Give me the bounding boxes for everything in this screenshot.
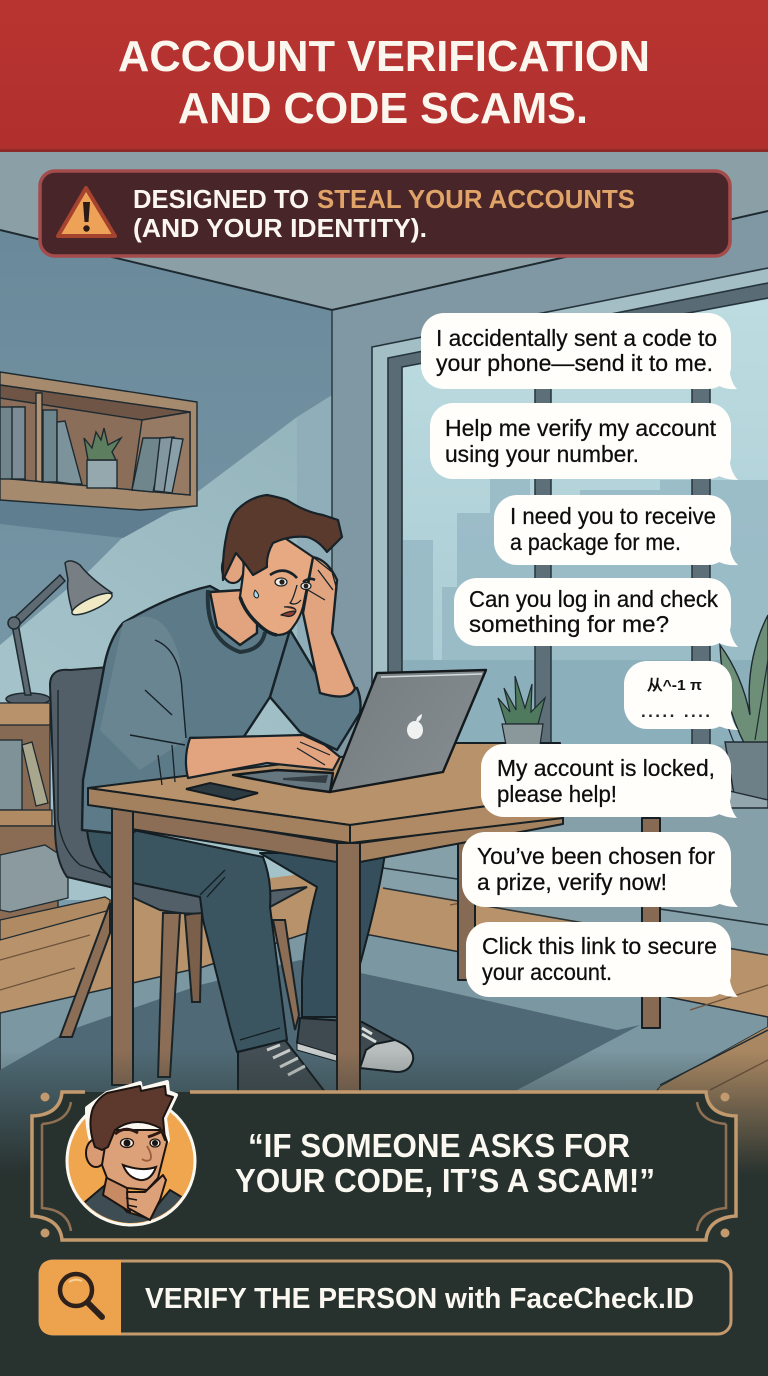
speech bubble 4	[454, 578, 738, 647]
desk lamp	[6, 561, 114, 705]
smartphone on desk	[186, 783, 258, 800]
title: AND CODE SCAMS.	[178, 84, 588, 133]
dark footer backdrop	[0, 1050, 768, 1376]
speech bubble 2: using your number.	[445, 441, 639, 467]
warning banner	[40, 171, 730, 256]
quote panel	[32, 1092, 736, 1240]
laptop logo	[407, 714, 423, 739]
speech bubble 8: Click this link to secure	[482, 933, 717, 959]
icon: magnifying glass	[60, 1274, 102, 1317]
speech bubble 4: something for me?	[469, 611, 669, 637]
quote text: “IF SOMEONE ASKS FOR	[248, 1127, 630, 1164]
avatar: smiling man	[67, 1082, 195, 1240]
person: torso and raised arm	[82, 557, 361, 835]
desk	[88, 743, 660, 1093]
person: head and face	[222, 495, 342, 635]
call to action text: VERIFY THE PERSON with FaceCheck.ID	[145, 1283, 694, 1315]
speech bubble 5 (garbled)	[624, 661, 738, 730]
speech bubble 5 (garbled): 从^-1 π	[647, 677, 703, 694]
speech bubble 8	[466, 922, 738, 997]
laptop	[233, 670, 486, 792]
speech bubble 4: Can you log in and check	[469, 586, 718, 612]
quote text: YOUR CODE, IT’S A SCAM!”	[235, 1162, 655, 1199]
speech bubble 7: You’ve been chosen for	[477, 843, 715, 869]
room scene background	[0, 150, 768, 1210]
chair	[50, 667, 307, 1077]
large potted plant	[720, 615, 768, 808]
speech bubble 6: My account is locked,	[497, 755, 715, 781]
icon: warning triangle	[58, 188, 115, 236]
speech bubble 5 (garbled): ..... ....	[641, 702, 710, 721]
speech bubble 3	[494, 495, 738, 565]
speech bubble 3: I need you to receive	[510, 503, 716, 529]
speech bubble 2	[430, 403, 738, 480]
speech bubble 6: please help!	[497, 781, 617, 807]
warning text: (AND YOUR IDENTITY).	[133, 213, 427, 243]
speech bubble 1: I accidentally sent a code to	[436, 325, 717, 351]
warning text: STEAL YOUR ACCOUNTS	[317, 184, 635, 214]
speech bubble 7: a prize, verify now!	[477, 869, 667, 895]
title banner	[0, 0, 768, 152]
left shelving unit with books and box	[0, 703, 110, 940]
speech bubble 3: a package for me.	[510, 529, 681, 555]
speech bubble 1	[421, 313, 737, 389]
speech bubble 8: your account.	[482, 959, 612, 985]
speech bubble 2: Help me verify my account	[445, 415, 717, 441]
speech bubble 7	[462, 832, 738, 907]
wall shelf with books and plant	[0, 372, 197, 510]
small potted plant	[498, 676, 545, 745]
call to action bar	[39, 1260, 731, 1335]
person: legs and shoes	[87, 830, 413, 1092]
person: forearm and hand on keyboard	[158, 735, 340, 785]
warning text: DESIGNED TO	[133, 184, 309, 214]
speech bubble 1: your phone—send it to me.	[436, 350, 713, 376]
speech bubble 6	[481, 744, 737, 818]
title: ACCOUNT VERIFICATION	[118, 32, 650, 81]
